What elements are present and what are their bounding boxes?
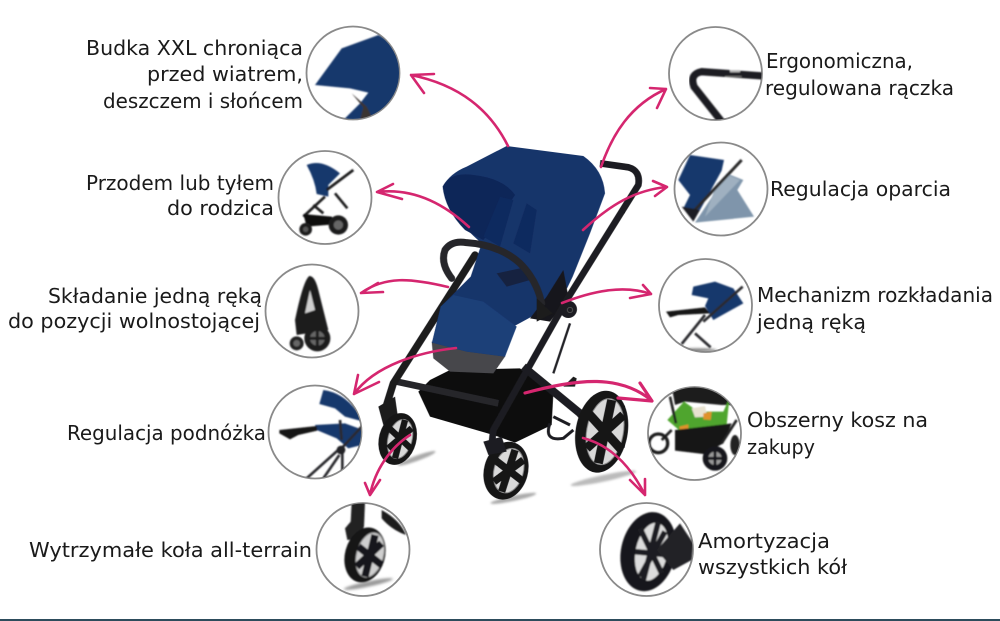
panel: shopping basket [648, 387, 928, 480]
icon: folded stroller [266, 264, 358, 358]
panel: backrest adjustment [674, 142, 951, 236]
label: recline: Mechanizm rozkładania [757, 283, 993, 307]
canopy underside [443, 174, 515, 240]
icon: rear wheel close-up [600, 503, 693, 596]
label: backrest: Regulacja oparcia [770, 177, 951, 201]
panel: suspension [600, 503, 847, 596]
icon: mini stroller [278, 151, 372, 244]
rear wheel [569, 386, 634, 477]
icon: front wheel [316, 503, 410, 596]
label: wheels: Wytrzymałe koła all-terrain [29, 538, 312, 562]
label: canopy: Budka XXL chroniąca [86, 36, 303, 60]
panel: footrest adjustment [67, 386, 363, 478]
icon: canopy close-up [306, 26, 402, 120]
label: suspension: wszystkich kół [698, 555, 847, 579]
label: reversible seat: Przodem lub tyłem [86, 171, 274, 195]
label: handle: regulowana rączka [765, 76, 954, 100]
arrow: to canopy [411, 74, 508, 146]
icon: reclined seat [659, 259, 752, 352]
label: one-hand fold [8, 284, 262, 333]
arrow: to front wheel [365, 435, 410, 495]
backrest shading [483, 197, 537, 253]
icon: basket with groceries [648, 387, 741, 480]
arrow: to reversible seat [377, 184, 469, 227]
basket [418, 368, 553, 443]
icon: footrest close-up [268, 386, 363, 478]
label: handle: Ergonomiczna, [766, 49, 913, 73]
arrow: to handle [601, 88, 666, 167]
footrest and seat [432, 342, 505, 373]
arrow: to fold [361, 280, 448, 293]
label: suspension [698, 529, 847, 579]
icon: handle close-up [669, 27, 763, 122]
panel: canopy XXL [86, 26, 402, 120]
label: basket: zakupy [747, 435, 815, 459]
label: one-hand fold: do pozycji wolnostojącej [8, 309, 260, 333]
panel: ergonomic handle [669, 27, 954, 122]
label: basket: Obszerny kosz na [747, 408, 928, 432]
arrow: to recline [562, 285, 651, 303]
label: canopy: przed wiatrem, [147, 62, 303, 86]
front left wheel [373, 409, 423, 469]
arrow: to basket [525, 381, 652, 401]
panel: one-hand fold [8, 264, 358, 358]
panel: all-terrain wheels [29, 503, 410, 596]
front right wheel [477, 437, 535, 505]
panel: recline mechanism [659, 259, 993, 352]
label: reversible seat: do rodzica [167, 196, 274, 220]
label: recline [756, 283, 993, 334]
icon: backrest positions [674, 142, 768, 236]
label: reversible seat [86, 171, 274, 220]
label: one-hand fold: Składanie jedną ręką [48, 284, 262, 308]
main frame [492, 163, 639, 445]
arrow: to suspension [583, 438, 645, 495]
label: canopy: deszczem i słońcem [103, 89, 303, 113]
panel: reversible seat [86, 151, 372, 244]
label: handle [765, 49, 954, 100]
seat cushion [432, 295, 517, 357]
label: canopy [86, 36, 303, 113]
label: recline: jedną ręką [756, 310, 866, 334]
label: basket [747, 408, 928, 459]
arrow: to backrest [583, 181, 667, 230]
arrow: to footrest [354, 348, 456, 394]
central stroller photo [373, 146, 639, 506]
label: footrest: Regulacja podnóżka [67, 421, 266, 445]
label: suspension: Amortyzacja [698, 529, 830, 553]
bumper bar [443, 242, 542, 303]
